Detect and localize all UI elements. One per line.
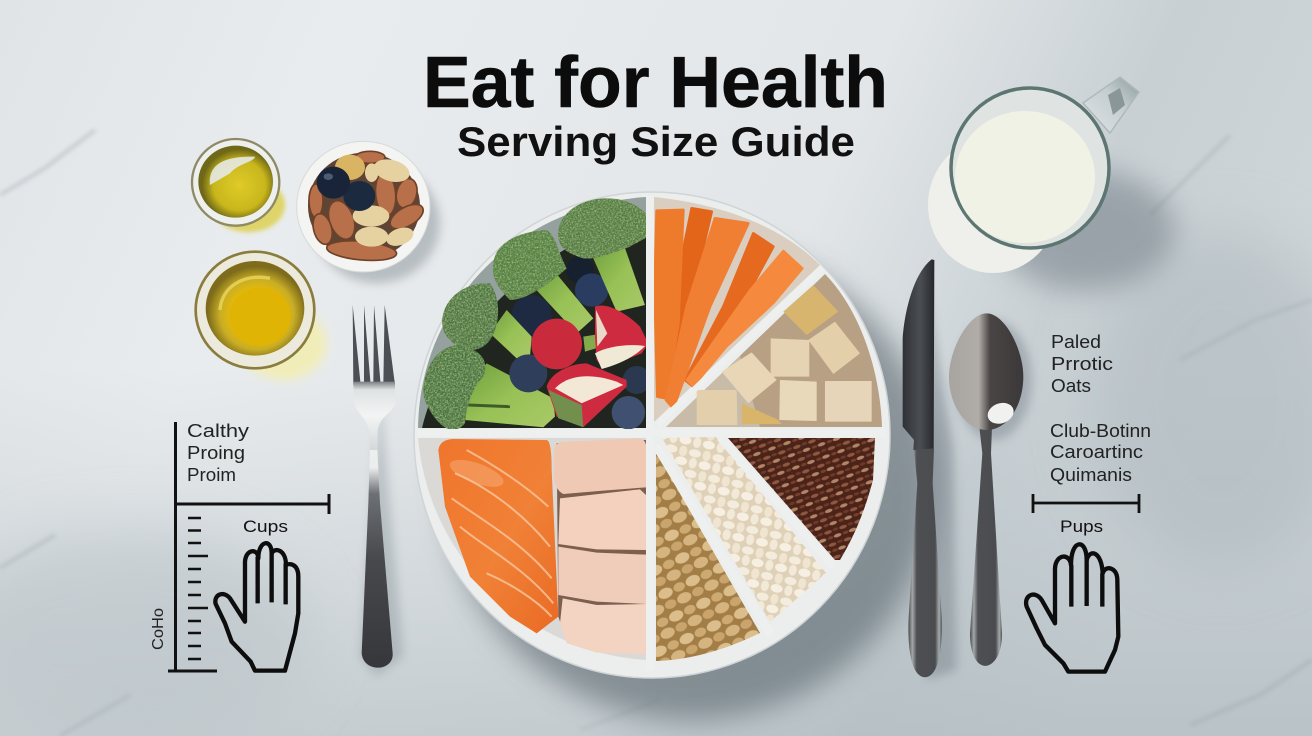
dinner plate with food <box>414 192 935 720</box>
ruler label lines: Proing <box>187 443 245 463</box>
upper text block: Paled <box>1051 332 1101 352</box>
cups label: Cups <box>243 517 288 536</box>
knife <box>903 259 957 680</box>
section: red rice <box>728 438 875 560</box>
lower text block: Quimanis <box>1050 465 1132 485</box>
ruler label lines: Proim <box>187 465 236 485</box>
ruler ticks <box>188 518 208 659</box>
section: salmon and chicken <box>418 438 648 660</box>
lower text block <box>1050 421 1151 485</box>
chicken underlay <box>557 440 646 652</box>
large oil dish <box>196 252 327 380</box>
title: Eat for Health: Eat for Health <box>423 42 888 123</box>
measure bar <box>1033 494 1139 513</box>
ruler label lines <box>187 421 249 485</box>
plate dividers <box>417 196 886 670</box>
nut bowl <box>297 141 440 283</box>
salmon fillet <box>438 439 558 633</box>
right measurement guide <box>1026 332 1151 672</box>
pups label: Pups <box>1060 517 1103 536</box>
section: tofu cubes <box>666 274 882 427</box>
hand icon <box>215 543 298 671</box>
section: carrots <box>654 197 820 422</box>
section: vegetables and fruit <box>418 197 653 430</box>
chicken pieces <box>554 438 647 654</box>
left measurement guide <box>150 421 329 671</box>
rotated label: CoHo <box>150 608 167 650</box>
hand icon <box>1026 544 1118 672</box>
plate base <box>414 192 890 678</box>
fork <box>353 305 403 677</box>
ruler axes <box>168 422 329 671</box>
upper text block: Oats <box>1051 376 1091 396</box>
upper text block <box>1051 332 1113 396</box>
milk glass <box>928 77 1175 290</box>
spoon <box>949 313 1032 666</box>
section: oats <box>656 452 760 661</box>
subtitle: Serving Size Guide: Serving Size Guide <box>457 118 855 165</box>
lower text block: Club-Botinn <box>1050 421 1151 441</box>
section: white rice <box>662 437 826 622</box>
plate shadow <box>445 240 935 720</box>
ruler label lines: Calthy <box>187 421 249 441</box>
lower text block: Caroartinc <box>1050 442 1143 462</box>
upper text block: Prrotic <box>1051 354 1113 374</box>
small oil dish <box>192 139 285 232</box>
